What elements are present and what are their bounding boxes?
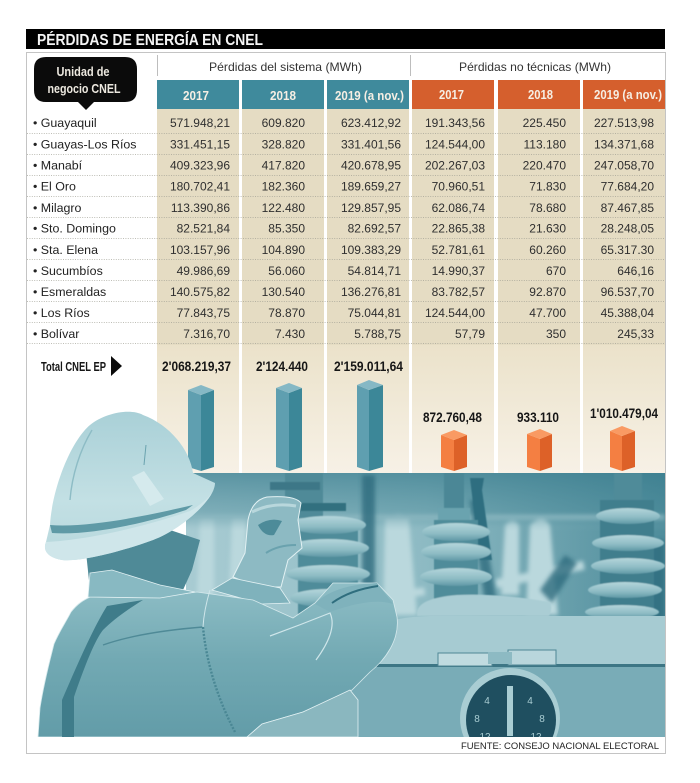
row: Guayaquil: 227.513,98 [594,116,654,130]
bar: no técnicas 2019 [610,426,635,471]
photo scenery: 12 [530,732,542,743]
row: Guayas-Los Ríos: 331.401,56 [341,137,401,151]
column headers: no técnicas: 2019 (a nov.) [594,87,662,102]
row: Guayas-Los Ríos: • Guayas-Los Ríos [33,137,137,151]
row: Guayas-Los Ríos: 331.451,15 [170,137,230,151]
row: Sucumbíos: • Sucumbíos [33,264,103,278]
row: Guayas-Los Ríos: 113.180 [524,137,566,151]
row: Esmeraldas: 92.870 [529,285,566,299]
row: Guayas-Los Ríos: 124.544,00 [425,137,485,151]
row: Sta. Elena: 52.781,61 [432,243,485,257]
row: Sto. Domingo: 82.521,84 [177,222,230,236]
row: Sta. Elena: 104.890 [262,243,305,257]
row: Guayas-Los Ríos: 328.820 [262,137,305,151]
row: Los Ríos: 45.388,04 [601,306,654,320]
total values [162,358,658,425]
row: Sucumbíos: 670 [546,264,566,278]
row: Esmeraldas: 96.537,70 [601,285,654,299]
column headers: no técnicas: 2018 [528,87,553,102]
row: Los Ríos: 124.544,00 [425,306,485,320]
row: Bolívar [33,327,654,341]
column headers: no técnicas: 2017 [439,87,464,102]
row: Milagro: 78.680 [529,201,566,215]
row: Bolívar: • Bolívar [33,327,79,341]
row: Esmeraldas: 140.575,82 [170,285,230,299]
table rows [33,116,654,341]
total values: 2'124.440 [256,358,308,374]
row: Los Ríos: 47.700 [529,306,566,320]
row: Sto. Domingo: 22.865,38 [432,222,485,236]
column backgrounds [157,109,665,473]
photo scenery: 8 [539,714,545,725]
row: Los Ríos: 75.044,81 [348,306,401,320]
heading: pérdidas no técnicas: Pérdidas no técnicas (MWh) [459,60,611,74]
row: Sucumbíos: 49.986,69 [177,264,230,278]
row: El Oro [33,180,654,194]
row: Sto. Domingo: 28.248,05 [601,222,654,236]
row: Sucumbíos: 56.060 [268,264,305,278]
row: Sta. Elena: • Sta. Elena [33,243,98,257]
bar: no técnicas 2017 [441,430,467,471]
row: Bolívar: 7.316,70 [183,327,230,341]
worker neck [86,530,200,590]
row: Milagro [33,201,654,215]
row: Guayaquil: 571.948,21 [170,116,230,130]
photo: electrical worker and transformer [38,412,665,768]
row: Sto. Domingo: 82.692,57 [348,222,401,236]
row: Sta. Elena: 60.260 [529,243,566,257]
row: Guayaquil: 191.343,56 [425,116,485,130]
row: Manabí: 420.678,95 [341,158,401,172]
callout: unidad de negocio [34,57,137,110]
title bar: PÉRDIDAS DE ENERGÍA EN CNEL [37,30,263,49]
row: Sta. Elena [33,243,654,257]
row: Esmeraldas: 136.276,81 [341,285,401,299]
row: El Oro: 77.684,20 [601,180,654,194]
row: Esmeraldas: • Esmeraldas [33,285,106,299]
row: Bolívar: 350 [546,327,566,341]
worker figure [38,412,397,737]
row: Manabí: 247.058,70 [594,158,654,172]
row: Esmeraldas: 130.540 [262,285,305,299]
column headers: sistema: 2019 (a nov.) [335,88,404,103]
row: Los Ríos [33,306,654,320]
row: Sta. Elena: 109.383,29 [341,243,401,257]
dotted row lines [27,134,665,344]
row: Esmeraldas: 83.782,57 [432,285,485,299]
row: Sto. Domingo: 85.350 [268,222,305,236]
worker glove [212,497,302,604]
bar: sistema 2019 [357,380,383,471]
row: Los Ríos: 78.870 [268,306,305,320]
row: El Oro: 182.360 [262,180,305,194]
row: Milagro: • Milagro [33,201,82,215]
row: Sto. Domingo: • Sto. Domingo [33,222,116,236]
column headers: sistema: 2018 [270,88,296,103]
row: Bolívar: 5.788,75 [354,327,401,341]
row: Guayas-Los Ríos [33,137,654,151]
row: Manabí: • Manabí [33,158,83,172]
row: Guayaquil: 225.450 [523,116,566,130]
row: Bolívar: 57,79 [455,327,485,341]
row: Sucumbíos: 646,16 [617,264,654,278]
callout: unidad de negocio: negocio CNEL [48,81,121,96]
column headers: no técnicas [412,80,665,109]
bar: sistema 2018 [276,383,302,471]
bar: sistema 2017 [188,385,214,471]
row: Sto. Domingo: 21.630 [529,222,566,236]
row: Milagro: 113.390,86 [171,201,230,215]
total values: 933.110 [517,409,559,425]
row: El Oro: 180.702,41 [170,180,230,194]
row: Bolívar: 245,33 [617,327,654,341]
worker strap [62,600,143,737]
row: El Oro: 71.830 [529,180,566,194]
row: Bolívar: 7.430 [275,327,305,341]
total values: 1'010.479,04 [590,405,658,421]
total values: 872.760,48 [423,409,482,425]
row: Guayaquil: 609.820 [262,116,305,130]
row: El Oro: • El Oro [33,180,76,194]
row: Guayaquil: • Guayaquil [33,116,97,130]
bar: no técnicas 2018 [527,429,552,471]
row: El Oro: 189.659,27 [341,180,401,194]
row: Esmeraldas [33,285,654,299]
row: Manabí: 220.470 [523,158,566,172]
row: Milagro: 62.086,74 [432,201,485,215]
source credit: FUENTE: CONSEJO NACIONAL ELECTORAL [461,741,660,752]
total label with arrow: Total CNEL EP [41,360,106,374]
total label with arrow [41,356,122,376]
row: Guayaquil: 623.412,92 [341,116,401,130]
photo scenery [186,473,665,737]
row: Guayas-Los Ríos: 134.371,68 [594,137,654,151]
total values: 2'159.011,64 [334,358,403,374]
row: Sta. Elena: 103.157,96 [170,243,230,257]
row: El Oro: 70.960,51 [432,180,485,194]
worker shirt [38,583,397,737]
row: Milagro: 122.480 [262,201,305,215]
title bar [26,29,665,49]
photo scenery: 12 [479,732,491,743]
total values: 2'068.219,37 [162,358,231,374]
row: Manabí [33,158,654,172]
photo scenery: 8 [474,714,480,725]
column headers: sistema [157,80,409,109]
row: Milagro: 87.467,85 [601,201,654,215]
row: Guayaquil [33,116,654,130]
column headers: sistema: 2017 [183,88,209,103]
row: Sucumbíos: 54.814,71 [348,264,401,278]
row: Milagro: 129.857,95 [341,201,401,215]
callout: unidad de negocio: Unidad de [56,64,110,79]
row: Sto. Domingo [33,222,654,236]
heading: pérdidas del sistema: Pérdidas del sistema (MWh) [209,60,362,74]
row: Manabí: 417.820 [262,158,305,172]
row: Manabí: 409.323,96 [170,158,230,172]
row: Sucumbíos: 14.990,37 [432,264,485,278]
worker collar [88,570,195,598]
row: Los Ríos: • Los Ríos [33,306,90,320]
helmet [45,412,215,560]
photo scenery: 4 [527,696,533,707]
row: Sucumbíos [33,264,654,278]
row: Manabí: 202.267,03 [425,158,485,172]
photo scenery: 4 [484,696,490,707]
row: Sta. Elena: 65.317.30 [601,243,654,257]
row: Los Ríos: 77.843,75 [177,306,230,320]
